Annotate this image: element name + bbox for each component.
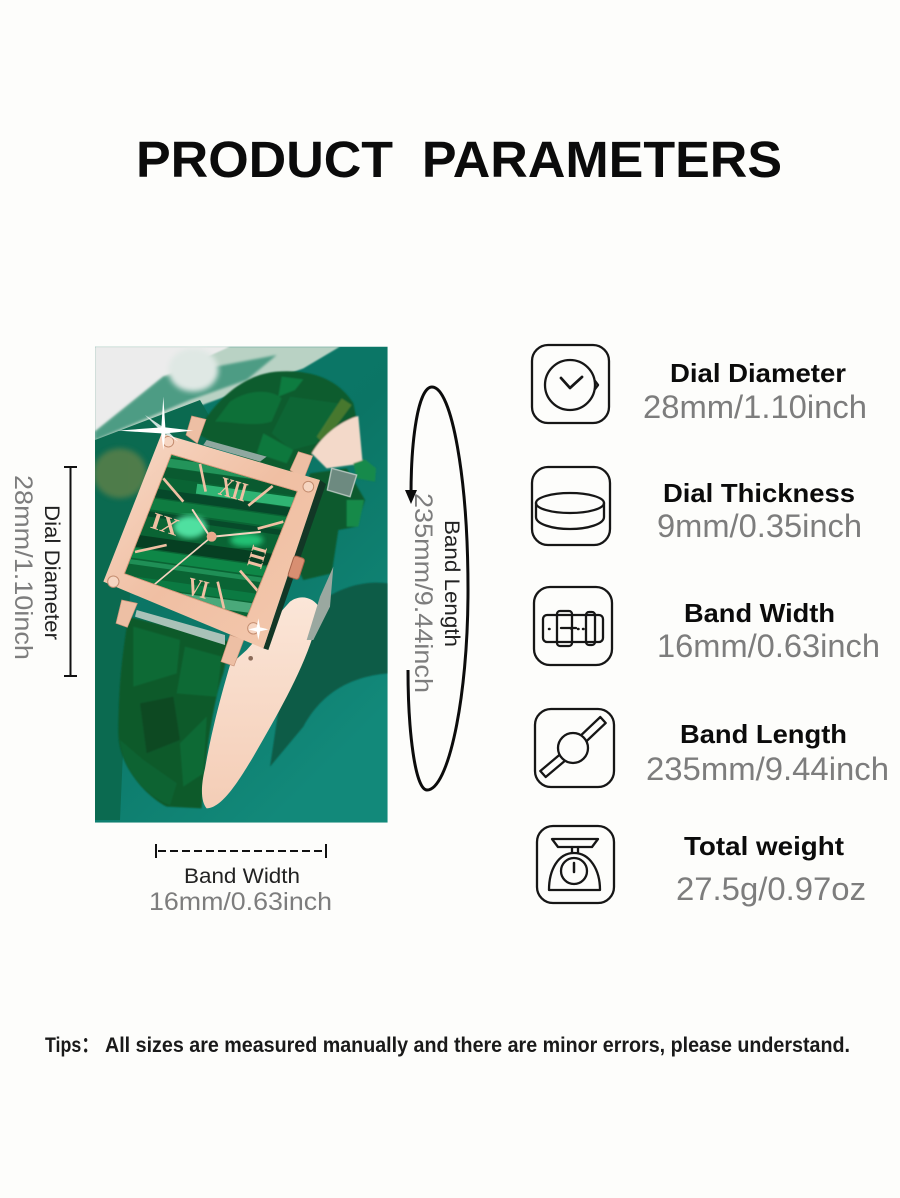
bracket bbox=[64, 467, 77, 676]
spec: dial diameter: Dial Diameter bbox=[670, 358, 846, 388]
inner cream band bbox=[202, 597, 320, 808]
callout: band width under photo bbox=[149, 844, 332, 916]
title: PRODUCT PARAMETERS bbox=[136, 131, 782, 188]
band width label: Band Width bbox=[184, 865, 300, 888]
dial diameter value: 28mm/1.10inch bbox=[9, 475, 37, 660]
spec: dial diameter: 28mm/1.10inch bbox=[643, 389, 867, 425]
malachite dial bbox=[125, 455, 297, 616]
screws bbox=[108, 436, 314, 634]
watch case bbox=[263, 480, 326, 650]
lower band bbox=[118, 617, 230, 808]
sparkle bbox=[118, 397, 268, 640]
roman numerals bbox=[147, 472, 273, 605]
upper band bbox=[197, 371, 376, 580]
lugs bbox=[116, 416, 313, 666]
hands bbox=[153, 510, 260, 585]
dashed dimension line bbox=[156, 844, 326, 858]
footer tips: All sizes are measured manually and there are minor errors, please understand. bbox=[105, 1034, 850, 1057]
icon: full strap length bbox=[535, 709, 614, 787]
spec: dial diameter bbox=[643, 358, 867, 425]
steel spring bar bbox=[135, 610, 225, 645]
spec: band width: Band Width bbox=[684, 598, 835, 628]
spec: dial thickness: Dial Thickness bbox=[663, 478, 855, 508]
spec: total weight: Total weight bbox=[684, 831, 844, 861]
callout: band length oval arrow bbox=[405, 387, 468, 790]
icon: kitchen scale bbox=[537, 826, 614, 903]
crown bbox=[288, 555, 305, 580]
icon: disc thickness bbox=[532, 467, 610, 545]
spec: total weight: 27.5g/0.97oz bbox=[676, 871, 866, 907]
roman numerals: III bbox=[242, 543, 273, 571]
roman numerals: XII bbox=[216, 472, 251, 508]
icon: clock dial bbox=[532, 345, 609, 423]
spec: band length: 235mm/9.44inch bbox=[646, 751, 889, 787]
band length label: Band Length bbox=[440, 520, 463, 647]
roman numerals: IX bbox=[147, 507, 183, 542]
footer tips: Tips： bbox=[45, 1034, 99, 1057]
product photo: green rectangular watch bbox=[81, 347, 388, 823]
oval arrow bbox=[408, 387, 468, 790]
band length value: 235mm/9.44inch bbox=[409, 493, 437, 693]
spec: band length bbox=[646, 719, 889, 787]
icon: watch band buckle bbox=[534, 587, 612, 665]
spec: dial thickness bbox=[657, 478, 862, 544]
spec: total weight bbox=[676, 831, 866, 907]
spec: band length: Band Length bbox=[680, 719, 847, 749]
hour markers bbox=[135, 464, 283, 609]
roman numerals: VI bbox=[184, 573, 211, 605]
spec: band width bbox=[657, 598, 880, 664]
band width value: 16mm/0.63inch bbox=[149, 888, 332, 916]
callout: dial diameter on photo side bbox=[9, 467, 77, 676]
spec: dial thickness: 9mm/0.35inch bbox=[657, 508, 862, 544]
spec: band width: 16mm/0.63inch bbox=[657, 628, 880, 664]
dial diameter label: Dial Diameter bbox=[40, 505, 63, 640]
